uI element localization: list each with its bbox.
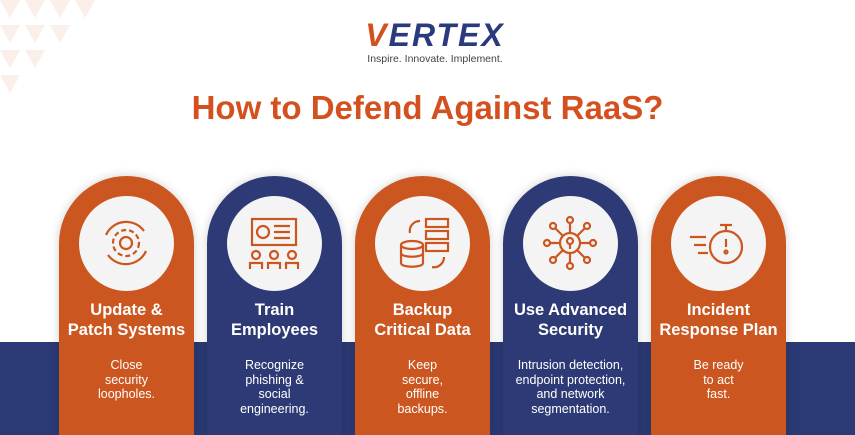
card 2: Employees [231, 321, 318, 339]
card 2 [207, 176, 342, 435]
card 5: fast. [707, 387, 730, 401]
card 5 [651, 176, 786, 435]
icon: gear [79, 196, 174, 291]
card 4: Security [538, 321, 603, 339]
card 1 [59, 176, 194, 435]
card 4: and network [536, 387, 605, 401]
icon: training [227, 196, 322, 291]
card 4: Use Advanced [514, 301, 627, 319]
card 3: Backup [393, 301, 452, 319]
icon: stopwatch alert [671, 196, 766, 291]
card 2: phishing & [245, 372, 304, 386]
card 3: offline [406, 387, 439, 401]
card 4 [503, 176, 638, 435]
card 4: segmentation. [531, 402, 610, 416]
band [0, 342, 855, 435]
card 2: social [259, 387, 290, 401]
card 5: Incident [687, 301, 750, 319]
icon: network lock [523, 196, 618, 291]
card 5: Response Plan [659, 321, 778, 339]
card 2: engineering. [240, 402, 309, 416]
icon: database backup [375, 196, 470, 291]
card 5: Be ready [693, 358, 744, 372]
logo: VERTEX [365, 17, 505, 53]
card 4: Intrusion detection, [518, 358, 623, 372]
card 2: Train [255, 301, 294, 319]
background pattern [0, 0, 95, 92]
card 3: Keep [408, 358, 437, 372]
card 3: Critical Data [374, 321, 471, 339]
card 1: Patch Systems [68, 321, 185, 339]
card 5: to act [703, 372, 734, 386]
card 1: Update & [90, 301, 163, 319]
logo: Inspire. Innovate. Implement. [367, 53, 503, 65]
card 3 [355, 176, 490, 435]
card 3: secure, [402, 372, 443, 386]
card 3: backups. [397, 402, 448, 416]
card 1: Close [111, 358, 142, 372]
title: How to Defend Against RaaS? [192, 89, 663, 126]
card 4: endpoint protection, [516, 372, 625, 386]
card 2: Recognize [245, 358, 304, 372]
card 1: security [105, 372, 148, 386]
card 1: loopholes. [98, 387, 155, 401]
